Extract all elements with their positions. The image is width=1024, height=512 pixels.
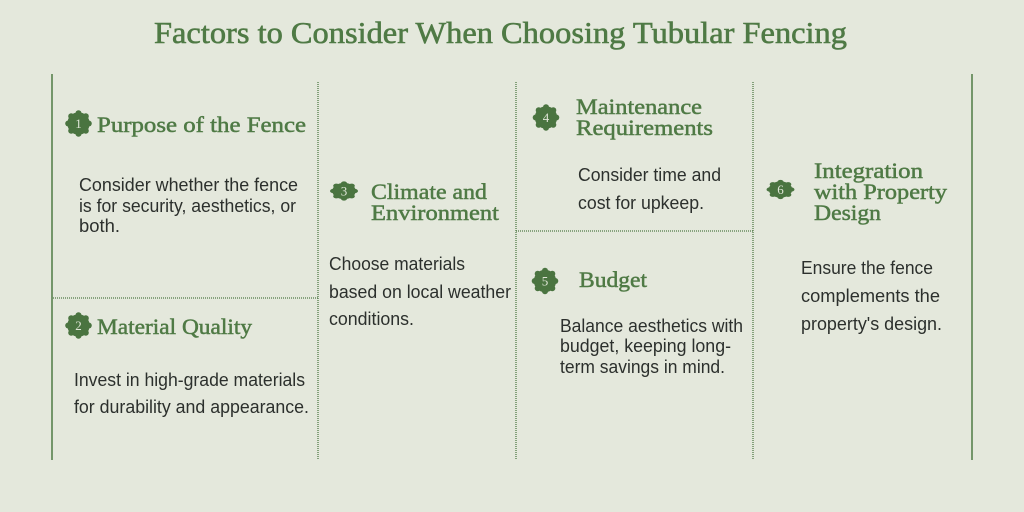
icon: badge 2: 2 xyxy=(75,318,82,333)
heading: maintenance requirements: Maintenance xyxy=(576,94,702,119)
panel: factor 1 purpose of the fence xyxy=(65,110,306,236)
icon: badge 4: 4 xyxy=(543,110,550,125)
icon: badge 6 xyxy=(767,180,794,199)
heading: material quality: Material Quality xyxy=(97,314,253,339)
text block: integration description xyxy=(801,258,942,334)
text block: budget description: term savings in mind. xyxy=(560,357,725,377)
text block: budget description xyxy=(560,316,743,377)
icon: badge 5: 5 xyxy=(542,274,548,288)
icon: badge 2 xyxy=(65,312,92,339)
text block: climate description xyxy=(329,254,511,329)
icon: badge 3: 3 xyxy=(341,184,347,198)
text block: purpose description xyxy=(79,175,298,236)
text block: climate description: conditions. xyxy=(329,309,414,329)
text block: maintenance description: Consider time and xyxy=(578,165,721,185)
heading: purpose of the fence: Purpose of the Fence xyxy=(97,112,306,137)
text block: climate description: Choose materials xyxy=(329,254,465,274)
panel: factor 3 climate and environment xyxy=(329,179,511,329)
text block: integration description: Ensure the fence xyxy=(801,258,933,278)
icon: badge 5 xyxy=(532,268,558,294)
heading: climate and environment: Climate and xyxy=(371,179,487,204)
heading: integration with property design: Design xyxy=(814,200,881,225)
panel: factor 6 integration with property design xyxy=(767,158,948,334)
panel: factor 5 budget xyxy=(532,267,743,377)
text block: maintenance description xyxy=(578,165,721,213)
heading: budget: Budget xyxy=(579,267,648,292)
text block: material description: for durability and appearance. xyxy=(74,397,309,417)
text block: integration description: property's design. xyxy=(801,314,942,334)
heading: maintenance requirements: Requirements xyxy=(576,115,713,140)
text block: material description xyxy=(74,370,309,417)
text block: budget description: Balance aesthetics with xyxy=(560,316,743,336)
text block: purpose description: Consider whether the fence xyxy=(79,175,298,195)
heading: integration with property design: Integration xyxy=(814,158,923,183)
text block: integration description: complements the xyxy=(801,286,940,306)
text block: material description: Invest in high-grade materials xyxy=(74,370,305,390)
heading: maintenance requirements xyxy=(576,94,713,140)
text block: climate description: based on local weather xyxy=(329,282,511,302)
heading: integration with property design: with Property xyxy=(814,179,948,204)
icon: badge 3 xyxy=(330,181,358,201)
panel: factor 2 material quality xyxy=(65,312,309,417)
panel: factor 4 maintenance requirements xyxy=(533,94,721,213)
text block: purpose description: is for security, aesthetics, or xyxy=(79,196,296,216)
heading: integration with property design xyxy=(814,158,948,225)
heading: climate and environment: Environment xyxy=(371,200,500,225)
title: Factors to Consider When Choosing Tubular Fencing xyxy=(154,15,847,50)
text block: purpose description: both. xyxy=(79,216,120,236)
text block: budget description: budget, keeping long- xyxy=(560,336,731,356)
icon: badge 1: 1 xyxy=(75,116,82,131)
heading: climate and environment xyxy=(371,179,500,225)
text block: maintenance description: cost for upkeep. xyxy=(578,193,704,213)
icon: badge 6: 6 xyxy=(777,182,784,197)
icon: badge 1 xyxy=(65,110,92,137)
icon: badge 4 xyxy=(533,104,559,131)
